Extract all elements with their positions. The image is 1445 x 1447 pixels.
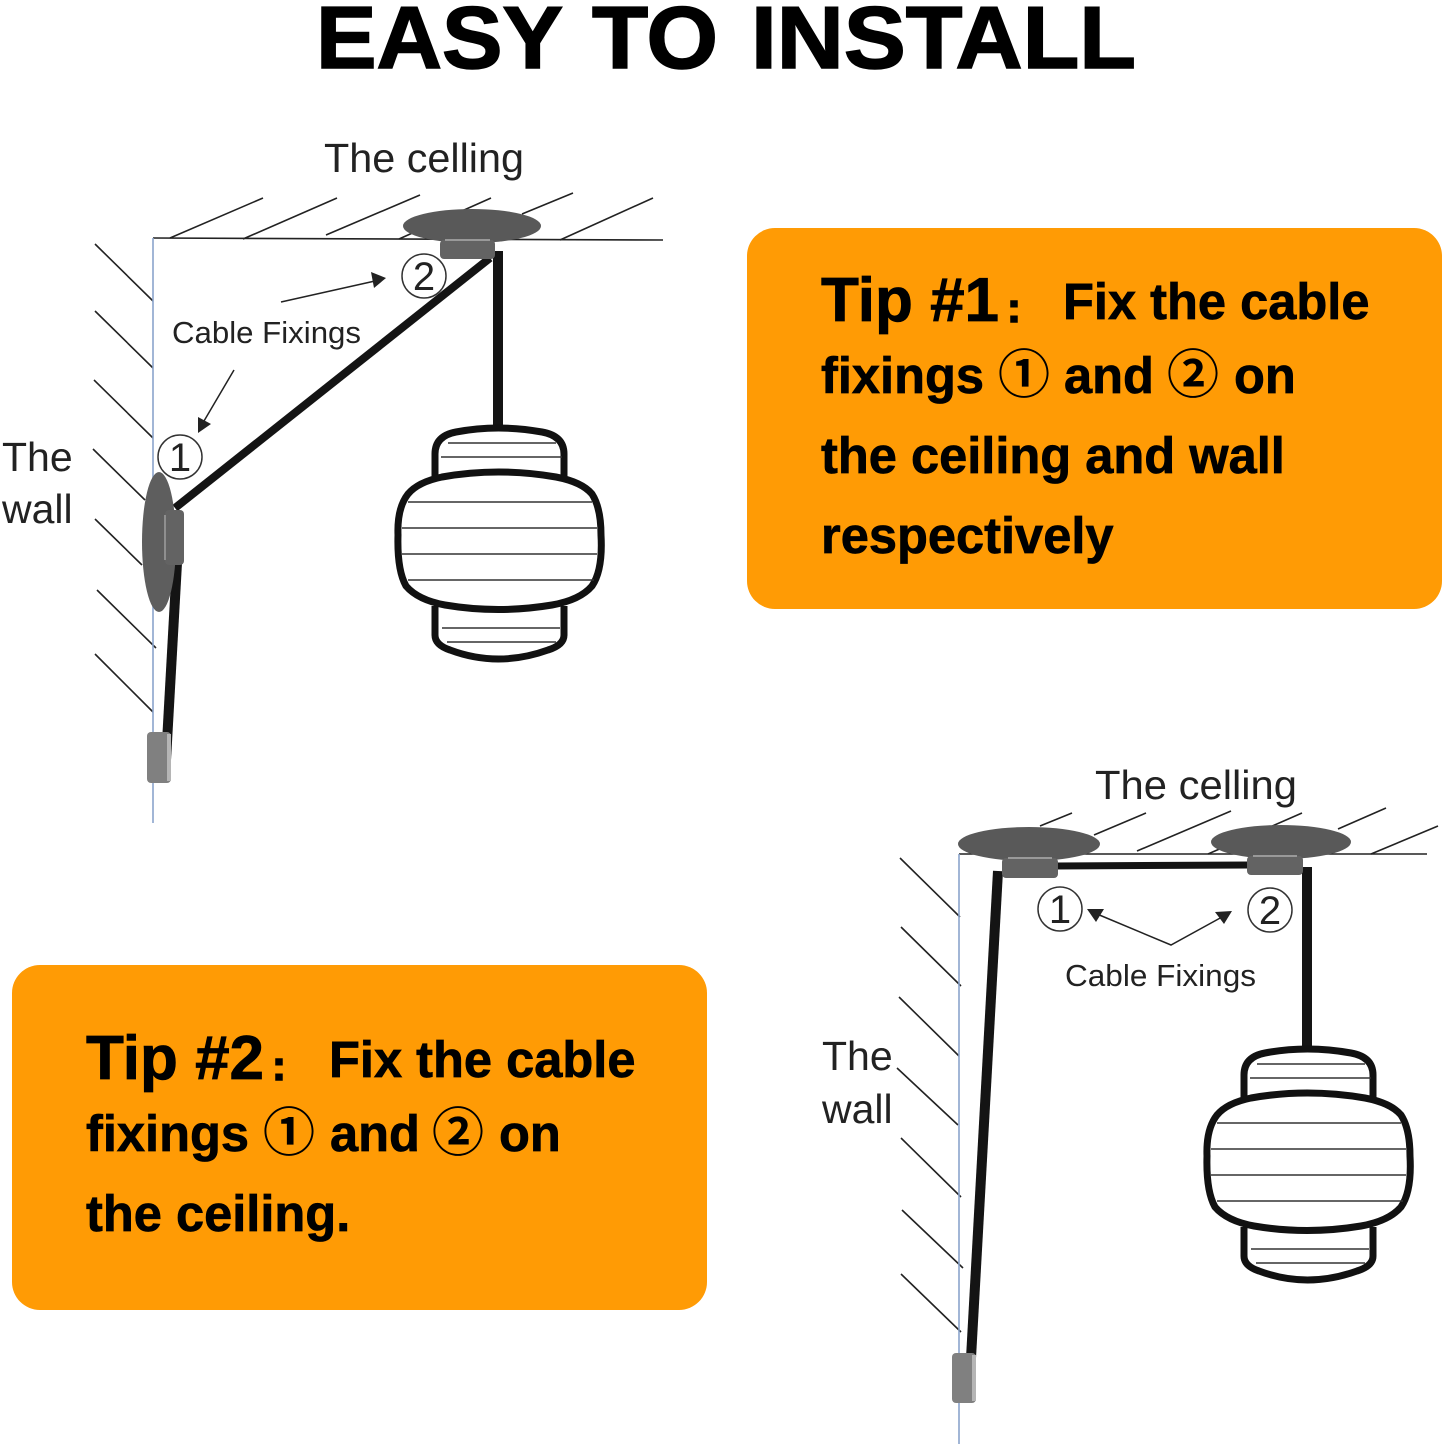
arrow to marker 2 bbox=[281, 272, 386, 302]
heading: tip 2: Tip #2 bbox=[86, 1024, 264, 1093]
tip 1 line 2: and bbox=[1064, 347, 1154, 404]
arrows to markers bbox=[1087, 909, 1232, 945]
label: the wall: wall bbox=[1, 486, 73, 532]
panel background bbox=[747, 228, 1442, 609]
tip 1 line 2: ① bbox=[998, 333, 1050, 408]
marker 2: 2 bbox=[1259, 889, 1281, 933]
cable to plug bbox=[166, 563, 177, 760]
marker 1: 1 bbox=[1049, 888, 1071, 932]
icon: plug weight bbox=[147, 732, 171, 783]
label: the wall: The bbox=[2, 434, 73, 480]
icon: ceiling fixing 1 bbox=[958, 827, 1100, 878]
tip 1 line 3: the ceiling and wall bbox=[821, 427, 1285, 484]
panel background bbox=[12, 965, 707, 1310]
icon: ceiling fixing 2 bbox=[403, 209, 541, 259]
tip 2 line 2: ① bbox=[263, 1091, 315, 1166]
label: the wall: wall bbox=[821, 1086, 893, 1132]
ceiling line bbox=[153, 238, 663, 240]
panel: tip 1 bbox=[747, 228, 1442, 609]
label: cable fixings: Cable Fixings bbox=[172, 315, 361, 350]
arrow to marker 1 bbox=[198, 370, 234, 433]
colon: : bbox=[272, 1042, 286, 1089]
tip 1 line 2: ② bbox=[1167, 333, 1219, 408]
diagram: ceiling-only mounting bbox=[821, 762, 1438, 1444]
tip 2 line 2: and bbox=[330, 1105, 420, 1162]
marker 2 bbox=[402, 254, 446, 299]
tip 1 line 2: fixings bbox=[821, 347, 984, 404]
cable to lamp bbox=[1302, 867, 1312, 1050]
cable to plug bbox=[971, 871, 998, 1358]
colon: : bbox=[1007, 284, 1021, 331]
icon: ceiling fixing 2 bbox=[1211, 825, 1351, 875]
tip 1 line 4: respectively bbox=[821, 507, 1114, 564]
marker 2 bbox=[1248, 888, 1292, 933]
panel: tip 2 bbox=[12, 965, 707, 1310]
tip 2 line 3: the ceiling. bbox=[86, 1185, 350, 1242]
marker 1: 1 bbox=[169, 436, 191, 480]
cable between fixings bbox=[1056, 865, 1250, 866]
marker 2: 2 bbox=[413, 255, 435, 299]
tip 1 line 1: Fix the cable bbox=[1063, 273, 1369, 330]
tip 2 line 2: on bbox=[499, 1105, 561, 1162]
ceiling hatching bbox=[1040, 808, 1438, 854]
marker 1 bbox=[158, 435, 202, 480]
marker 1 bbox=[1038, 887, 1082, 932]
wall line bbox=[958, 854, 960, 1444]
ceiling line bbox=[959, 853, 1427, 855]
tip 1 line 2: on bbox=[1234, 347, 1296, 404]
wall hatching bbox=[897, 858, 963, 1332]
wall hatching bbox=[93, 244, 156, 712]
icon: plug weight bbox=[952, 1353, 976, 1403]
diagram: wall and ceiling mounting bbox=[1, 135, 663, 823]
title bbox=[316, 0, 1136, 87]
icon: wall fixing 1 bbox=[142, 472, 184, 612]
lamp shade bbox=[398, 428, 601, 659]
heading: tip 1: Tip #1 bbox=[821, 266, 999, 335]
label: the ceiling: The celling bbox=[324, 135, 524, 181]
wall line bbox=[152, 238, 154, 823]
label: cable fixings: Cable Fixings bbox=[1065, 958, 1256, 993]
tip 2 line 2: ② bbox=[432, 1091, 484, 1166]
label: the wall: The bbox=[822, 1033, 893, 1079]
ceiling hatching bbox=[170, 193, 653, 240]
cable to lamp bbox=[493, 251, 503, 428]
cable: diagonal bbox=[175, 258, 490, 508]
tip 2 line 2: fixings bbox=[86, 1105, 249, 1162]
tip 2 line 1: Fix the cable bbox=[329, 1031, 635, 1088]
lamp shade bbox=[1207, 1049, 1410, 1280]
label: the ceiling: The celling bbox=[1095, 762, 1297, 808]
